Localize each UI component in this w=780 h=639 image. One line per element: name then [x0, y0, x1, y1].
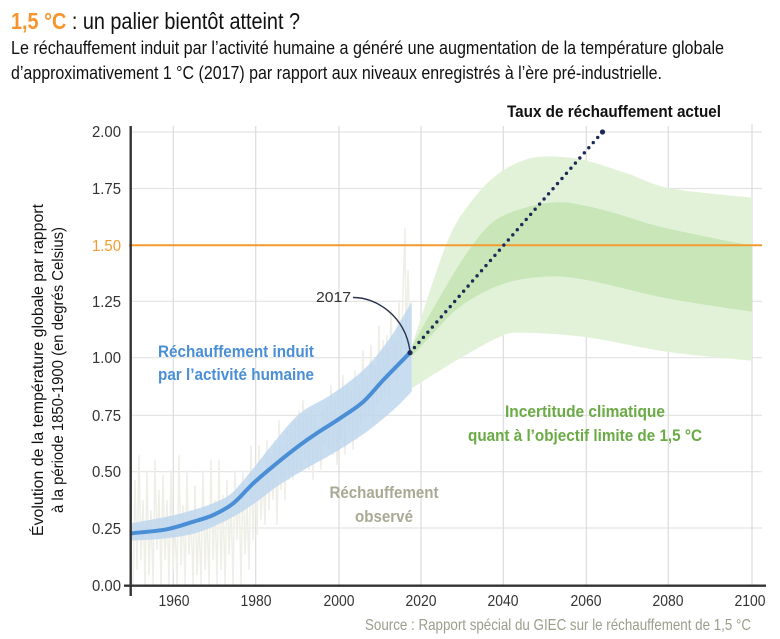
label: observed warming: Réchauffement [330, 483, 439, 502]
orange 1.5 °C line [129, 244, 762, 246]
y axis tick labels: 0.00 [92, 578, 121, 595]
blue induced-warming line [132, 353, 410, 533]
label: observed warming: observé [355, 507, 413, 526]
blue induced-warming band [131, 302, 412, 541]
label: human-induced warming [158, 342, 314, 384]
x axis tick labels: 2100 [734, 593, 766, 610]
current warming rate dotted line [410, 132, 602, 353]
green uncertainty band, inner [412, 202, 752, 357]
x axis tick labels: 2060 [570, 593, 602, 610]
x axis tick labels: 2080 [652, 593, 684, 610]
title: 1,5 °C : un palier bientôt atteint ? [11, 8, 300, 34]
x axis tick labels: 2040 [488, 593, 519, 610]
x axis tick labels: 1980 [240, 593, 272, 610]
y axis tick labels: 1.75 [92, 181, 121, 198]
x axis tick labels [158, 593, 766, 610]
x axis tick labels: 2020 [406, 593, 437, 610]
x axis tick labels: 2000 [324, 593, 355, 610]
y axis tick labels: 1.50 [92, 238, 121, 255]
y axis title: Évolution de la température globale par rapport [28, 203, 47, 536]
y axis tick labels: 2.00 [92, 124, 121, 141]
green uncertainty band, outer [412, 157, 752, 388]
label: observed warming [330, 483, 439, 526]
y axis tick labels: 0.50 [92, 464, 121, 481]
label: climate uncertainty: Incertitude climatique [505, 402, 665, 421]
y axis title [28, 203, 67, 536]
y axis title: à la période 1850-1900 (en degrés Celsius) [50, 227, 67, 513]
observed warming noise [133, 228, 410, 585]
x axis tick labels: 1960 [158, 593, 190, 610]
y axis tick labels: 1.00 [92, 350, 121, 367]
intro text [11, 38, 724, 83]
chart [92, 124, 766, 610]
y axis tick labels [92, 124, 121, 595]
intro text: d’approximativement 1 °C (2017) par rapport aux niveaux enregistrés à l’ère pré-industrielle. [11, 63, 662, 83]
2017 marker and leader: 2017 [316, 289, 351, 306]
label: human-induced warming: Réchauffement induit [158, 342, 314, 361]
label: current warming rate: Taux de réchauffement actuel [507, 102, 721, 121]
label: climate uncertainty: quant à l’objectif limite de 1,5 °C [468, 426, 702, 445]
label: human-induced warming: par l’activité humaine [158, 365, 314, 384]
axes [124, 126, 766, 596]
y axis tick labels: 0.75 [92, 408, 121, 425]
2017 marker and leader [316, 129, 605, 355]
y axis tick labels: 0.25 [92, 521, 121, 538]
label: climate uncertainty [468, 402, 702, 445]
y axis tick labels: 1.25 [92, 294, 121, 311]
